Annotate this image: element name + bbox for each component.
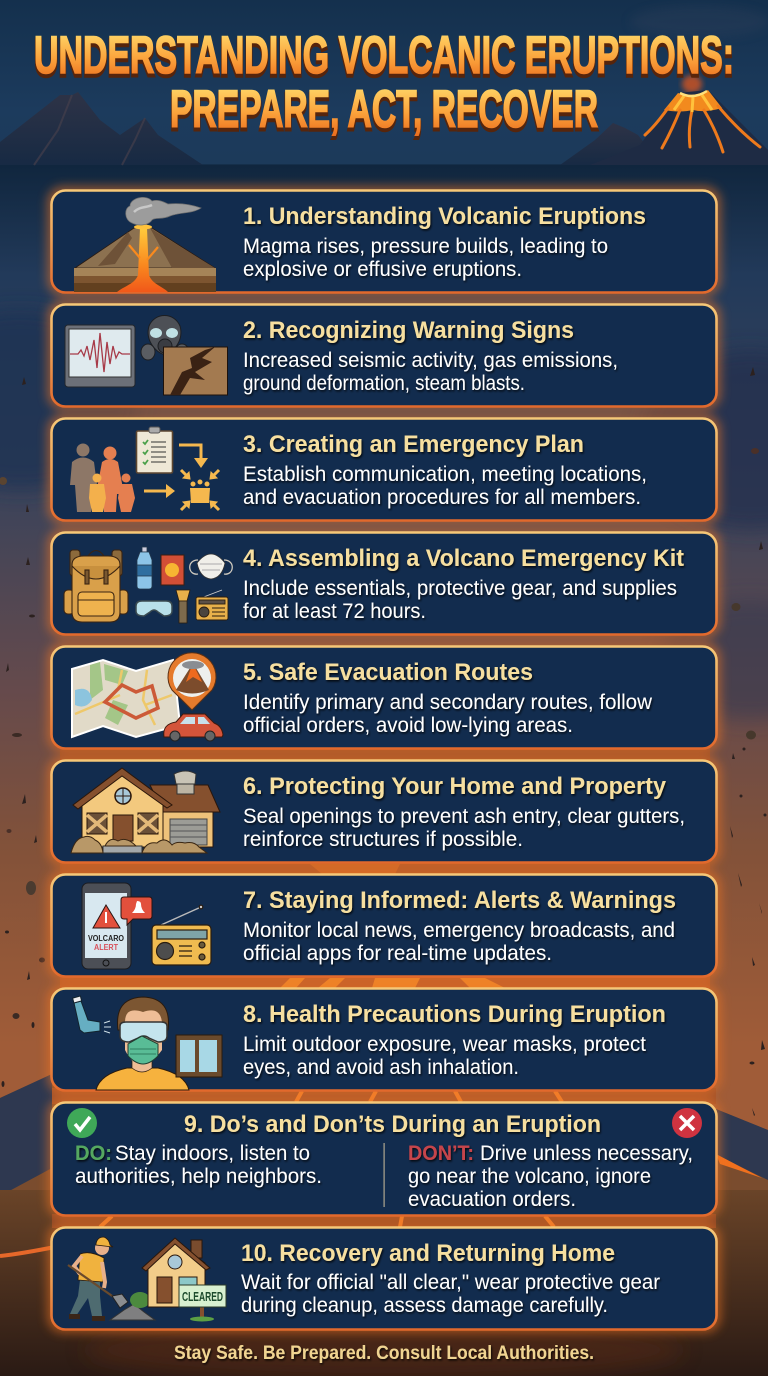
icon: bent arrow: [179, 445, 208, 468]
icon: ground crack: [164, 347, 228, 395]
do column: [75, 1142, 322, 1188]
heading: 4. Assembling a Volcano Emergency Kit: [243, 545, 684, 572]
icon: phone with alert: VOLCARO: [88, 934, 124, 943]
panel 6: protecting home: [52, 760, 716, 862]
icon: gas mask: [141, 316, 189, 360]
text block: [243, 691, 653, 737]
icon: goggles: [136, 601, 172, 616]
text block: [243, 919, 675, 965]
text block: Identify primary and secondary routes, follow: [243, 691, 653, 714]
text block: and evacuation procedures for all members.: [243, 486, 641, 509]
icon: notification bubble: [121, 897, 152, 925]
icon: family: [70, 444, 135, 512]
text block: eyes, and avoid ash inhalation.: [243, 1056, 519, 1079]
icon: seismograph monitor: [65, 325, 135, 387]
text block: during cleanup, assess damage carefully.: [241, 1294, 608, 1317]
text block: [243, 805, 685, 851]
header mountains: [0, 92, 668, 165]
don't column: DON’T:: [408, 1142, 474, 1165]
icon: house: [130, 1238, 210, 1308]
panel 1: understanding eruptions: [52, 190, 716, 292]
text block: ground deformation, steam blasts.: [243, 372, 525, 395]
text block: [243, 349, 618, 395]
panel 3: emergency plan: [52, 418, 716, 520]
panel glows: [47, 186, 721, 1333]
icon: flashlight: [176, 590, 190, 623]
icon: cleared sign: CLEARED: [182, 1289, 223, 1304]
panel 10: recovery: [52, 1228, 716, 1330]
falling ash rocks: [0, 367, 766, 1116]
heading: 6. Protecting Your Home and Property: [243, 773, 666, 800]
text block: Increased seismic activity, gas emissions,: [243, 349, 618, 372]
text block: Wait for official "all clear," wear protective gear: [241, 1271, 660, 1294]
do column: authorities, help neighbors.: [75, 1165, 322, 1188]
panel 7: alerts: [52, 874, 716, 976]
icon: boarded house with sandbags: [71, 768, 220, 853]
icon: phone with alert: [82, 883, 131, 969]
panel 5: evacuation routes: [52, 646, 716, 748]
heading: 2. Recognizing Warning Signs: [243, 317, 574, 344]
icon: rubble pile: [110, 1304, 155, 1320]
icon: worker with shovel: [68, 1237, 128, 1321]
do column: DO:: [75, 1142, 112, 1165]
title: [34, 26, 734, 142]
icon: radio: [152, 905, 211, 965]
panel 4: emergency kit: [52, 532, 716, 634]
text block: Limit outdoor exposure, wear masks, protect: [243, 1033, 646, 1056]
heading: 7. Staying Informed: Alerts & Warnings: [243, 887, 676, 914]
text block: official apps for real-time updates.: [243, 942, 552, 965]
icon: meeting group with arrows: [181, 470, 219, 510]
text block: for at least 72 hours.: [243, 600, 426, 623]
icon: horizontal arrow: [144, 484, 175, 498]
icon: radio: [196, 590, 228, 620]
text block: [241, 1271, 660, 1317]
icon: erupting volcano in header: [590, 6, 768, 165]
text block: Magma rises, pressure builds, leading to: [243, 235, 608, 258]
panel 9: do's and don'ts: [52, 1102, 716, 1216]
panel 2: warning signs: [52, 304, 716, 406]
text block: Include essentials, protective gear, and supplies: [243, 577, 677, 600]
heading: 9. Do’s and Don’ts During an Eruption: [184, 1111, 601, 1138]
don't column: Drive unless necessary,: [480, 1142, 693, 1165]
heading: 8. Health Precautions During Eruption: [243, 1001, 666, 1028]
text block: Establish communication, meeting locations,: [243, 463, 647, 486]
icon: clipboard checklist: [136, 427, 172, 473]
heading: 5. Safe Evacuation Routes: [243, 659, 533, 686]
footer tagline: Stay Safe. Be Prepared. Consult Local Authorities.: [174, 1343, 594, 1364]
icon: window: [176, 1035, 222, 1077]
icon: backpack: [64, 550, 128, 622]
do column: Stay indoors, listen to: [115, 1142, 310, 1165]
text block: [243, 463, 647, 509]
don't column: evacuation orders.: [408, 1188, 576, 1211]
text block: explosive or effusive eruptions.: [243, 258, 522, 281]
icon: dust mask: [190, 554, 232, 579]
heading: 3. Creating an Emergency Plan: [243, 431, 584, 458]
text block: Seal openings to prevent ash entry, clear gutters,: [243, 805, 685, 828]
icon: phone with alert: ALERT: [94, 943, 118, 952]
icon: food packet: [161, 555, 184, 585]
heading: 1. Understanding Volcanic Eruptions: [243, 203, 646, 230]
icon: red cross: [672, 1108, 702, 1138]
icon: red car: [164, 714, 223, 741]
text block: [243, 577, 677, 623]
text block: [243, 1033, 646, 1079]
icon: inhaler: [73, 996, 111, 1033]
text block: reinforce structures if possible.: [243, 828, 523, 851]
icon: volcano location pin: [168, 653, 216, 710]
icon: water bottle: [137, 547, 152, 589]
don't column: go near the volcano, ignore: [408, 1165, 651, 1188]
panel 8: health: [52, 988, 716, 1090]
icon: green check: [67, 1108, 97, 1138]
icon: cleared sign: [179, 1285, 226, 1322]
don't column: [408, 1142, 693, 1211]
icon: folded map: [72, 660, 180, 737]
icon: person with goggles and mask: [96, 997, 189, 1090]
text block: [243, 235, 608, 281]
text block: official orders, avoid low-lying areas.: [243, 714, 573, 737]
text block: Monitor local news, emergency broadcasts, and: [243, 919, 675, 942]
heading: 10. Recovery and Returning Home: [241, 1240, 615, 1267]
icon: volcano cross-section: [74, 197, 216, 292]
